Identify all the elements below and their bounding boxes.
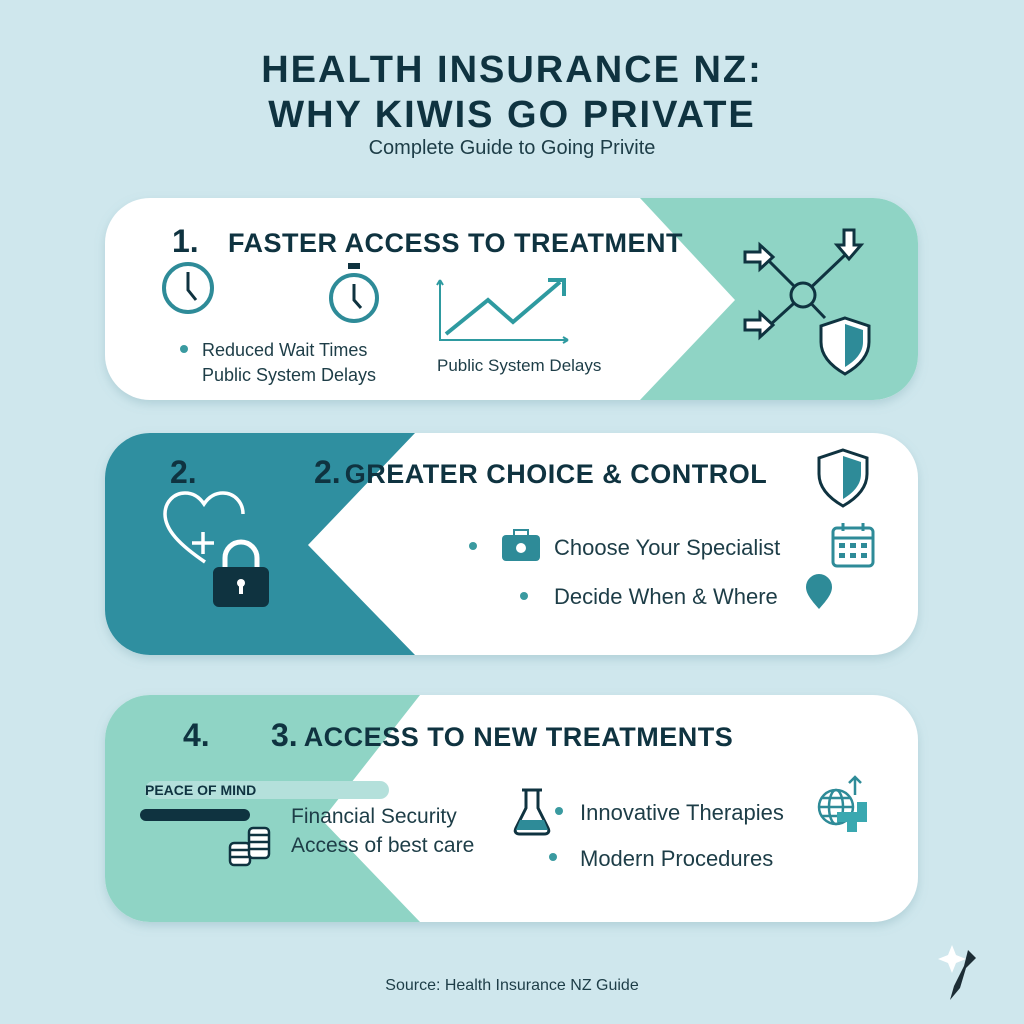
text: Financial Security (291, 805, 457, 828)
icon: calendar (833, 523, 873, 566)
icon: nz map sparkle (938, 945, 976, 1000)
bullets (469, 530, 780, 609)
title: WHY KIWIS GO PRIVATE (268, 94, 756, 136)
chart: line up (437, 280, 568, 343)
icon: flask (515, 790, 549, 834)
heading 1: FASTER ACCESS TO TREATMENT (228, 228, 683, 258)
icon: shield (819, 450, 867, 506)
panel: choice & control (105, 433, 918, 655)
icon: clock (164, 264, 212, 312)
icon: network shield (745, 230, 869, 374)
bullets (549, 800, 784, 871)
bullet text: Reduced Wait Times (202, 340, 367, 360)
panel: faster access (105, 198, 918, 400)
text (291, 805, 474, 857)
heading 3: ACCESS TO NEW TREATMENTS (304, 722, 733, 752)
heading 2: 2. (314, 454, 341, 490)
text: Access of best care (291, 834, 474, 857)
chart caption: Public System Delays (437, 356, 601, 375)
heading 3: 4. (183, 717, 210, 753)
bullet text: Public System Delays (202, 365, 376, 385)
panel: new treatments (105, 695, 918, 922)
heading 2: 2. (170, 454, 197, 490)
bullets: Choose Your Specialist (554, 535, 780, 560)
peace of mind bar: PEACE OF MIND (145, 782, 256, 798)
bullet text (180, 340, 376, 385)
icon: pin (806, 574, 832, 609)
heading 1: 1. (172, 223, 199, 259)
heading 2: GREATER CHOICE & CONTROL (345, 459, 767, 489)
icon: coins (230, 828, 269, 865)
source: Source: Health Insurance NZ Guide (385, 977, 639, 994)
title (261, 49, 763, 136)
peace of mind bar (140, 781, 389, 821)
heading 3: 3. (271, 717, 298, 753)
bullets: Modern Procedures (580, 846, 773, 871)
icon: stopwatch (331, 263, 377, 321)
bullets: Decide When & Where (554, 584, 778, 609)
bullets: Innovative Therapies (580, 800, 784, 825)
icon: globe plus (819, 777, 867, 832)
subtitle: Complete Guide to Going Privite (369, 137, 655, 159)
title: HEALTH INSURANCE NZ: (261, 49, 763, 91)
icon: heart lock (165, 493, 268, 606)
